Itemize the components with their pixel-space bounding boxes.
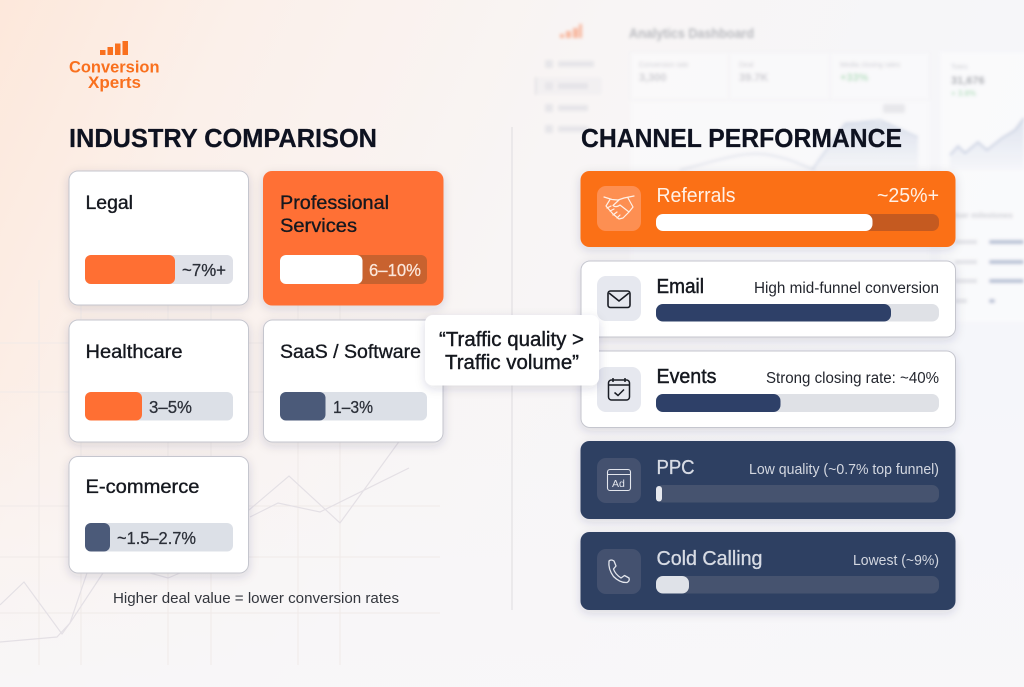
channel: Events [581,351,956,428]
callout: Traffic quality over volume: “Traffic quality > [439,329,584,351]
label: Healthcare: Healthcare [86,342,182,363]
logo wordmark [69,58,160,92]
logo: Conversion Xperts [69,41,160,92]
bar: PPC [656,485,939,502]
icon: calendar [597,367,641,412]
blurred analytics dashboard background: Media closing rates [840,62,901,69]
bar: Healthcare 3–5% [85,392,233,420]
note: Low quality: Low quality (~0.7% top funnel) [749,462,939,478]
note: Strong closing rate: Strong closing rate: ~40% [766,370,939,387]
blurred analytics dashboard background [535,24,1024,322]
caption: Higher deal value = lower conversion rates [113,590,399,607]
card: Professional Services [263,171,444,306]
blurred analytics dashboard background: Deal [739,62,754,69]
blurred analytics dashboard background: 39.7K [739,72,768,84]
icon: ad window: Ad [612,478,625,490]
bar: Email [656,304,939,322]
card: E-commerce [69,456,248,573]
channel: Referrals [580,171,956,247]
blurred analytics dashboard background: Totes [951,64,968,71]
icon: phone [597,549,641,594]
bar: Professional Services 6–10%: 6–10% [369,260,421,280]
channel: PPC [580,441,956,519]
card: Legal [69,171,248,305]
label: Cold Calling: Cold Calling [656,548,762,570]
value: ~25%+: ~25%+ [877,185,939,207]
bar: Referrals [656,214,939,231]
bar: Legal ~7%+ [85,255,233,284]
blurred analytics dashboard background: + 3.6% [951,89,976,98]
bar: Legal ~7%+: ~7%+ [182,260,226,280]
card: Healthcare [69,320,248,442]
blurred analytics dashboard background: Analytics Dashboard [629,26,754,41]
bar: SaaS 1–3% [280,392,427,420]
channel: Cold Calling [580,532,956,610]
heading: Industry Comparison: INDUSTRY COMPARISON [69,125,377,153]
label: SaaS / Software: SaaS / Software [280,342,421,363]
channel: Email [581,261,956,337]
label: Professional Services: Professional [280,193,389,214]
icon: handshake [597,186,641,231]
heading: Channel Performance: CHANNEL PERFORMANCE [581,125,902,153]
label: Email: Email [656,276,704,298]
label: Legal: Legal [86,193,133,214]
icon: envelope [597,276,641,321]
blurred analytics dashboard background: 3,300 [639,72,667,84]
label: Referrals: Referrals [656,185,736,207]
callout: Traffic quality over volume: Traffic volume” [445,352,579,374]
icon: ad window [597,458,641,503]
label: Professional Services: Services [280,216,357,237]
callout: Traffic quality over volume [425,315,599,386]
center divider [511,127,513,610]
note: High mid-funnel conversion: High mid-funnel conversion [754,280,939,297]
note: Lowest: Lowest (~9%) [853,553,939,569]
bar: Healthcare 3–5%: 3–5% [149,397,192,417]
label: E-commerce: E-commerce [86,477,200,498]
label: PPC: PPC [656,457,694,479]
blurred analytics dashboard background: Conversion rate [639,62,689,69]
logo wordmark: Conversion [69,58,160,76]
blurred analytics dashboard background: User milestones [951,211,1013,220]
blurred analytics dashboard background: +33% [840,72,869,84]
bar: SaaS 1–3%: 1–3% [333,397,373,417]
bar: Events [656,394,939,412]
bar: Professional Services 6–10% [280,255,427,284]
bar: E-commerce ~1.5–2.7%: ~1.5–2.7% [117,528,196,548]
blurred analytics dashboard background: 31,676 [951,75,985,87]
label: Events: Events [656,366,716,388]
bar: E-commerce ~1.5–2.7% [85,523,233,552]
logo wordmark: Xperts [88,73,141,92]
background line chart decoration [0,280,440,665]
logo icon: signal bars [100,41,128,55]
bar: Cold Calling [656,576,939,594]
card: SaaS / Software [264,320,443,442]
label: Professional Services [280,193,389,237]
